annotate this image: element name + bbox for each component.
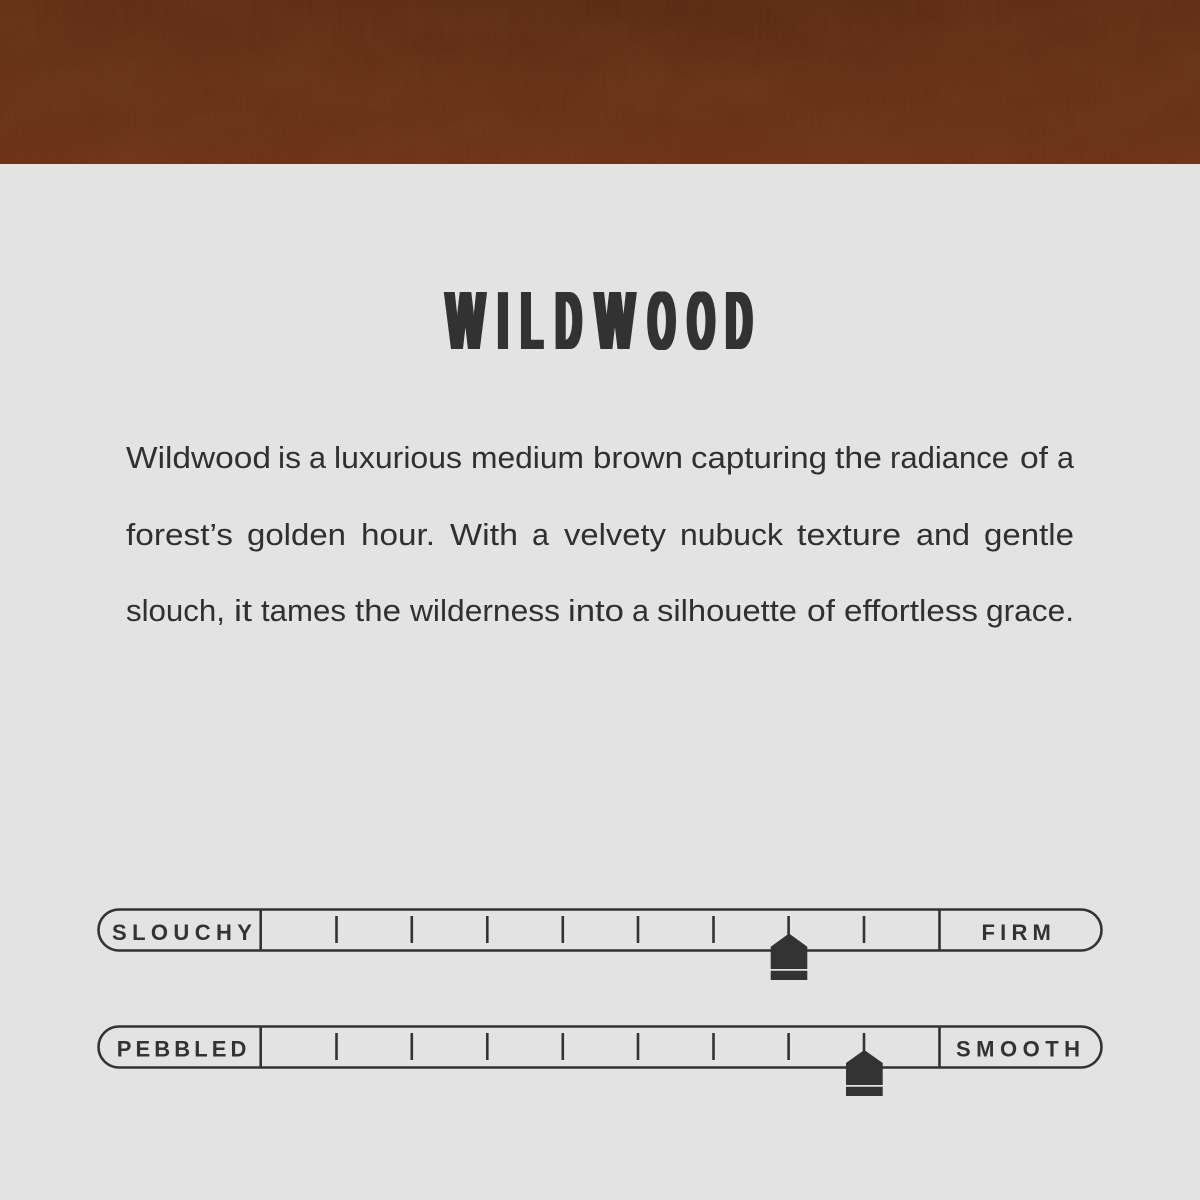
description text: capturing: [691, 440, 827, 475]
description text: tames: [261, 593, 346, 628]
description text: velvety: [564, 517, 667, 552]
label: smooth: SMOOTH: [956, 1036, 1086, 1062]
description text: nubuck: [680, 517, 784, 552]
description text: a: [309, 440, 327, 475]
scale: pebbled to smooth: [97, 1025, 1103, 1096]
label: pebbled: PEBBLED: [117, 1036, 251, 1062]
description text: hour.: [361, 517, 435, 552]
marker: [846, 1050, 883, 1096]
description text: and: [916, 517, 970, 552]
description text: slouch,: [126, 593, 225, 628]
description text: effortless: [844, 593, 978, 628]
description text: texture: [797, 517, 901, 552]
description text: brown: [593, 440, 683, 475]
description text: radiance: [890, 440, 1009, 475]
description text: grace.: [986, 593, 1074, 628]
description text: a: [1057, 440, 1075, 475]
description text: the: [355, 593, 401, 628]
marker: [771, 934, 807, 980]
description text: luxurious: [334, 440, 462, 475]
scale: slouchy to firm: [97, 908, 1103, 980]
description text: of: [807, 593, 835, 628]
description text: wilderness: [409, 593, 560, 628]
description text: it: [234, 593, 252, 628]
description text: into: [568, 593, 624, 628]
description text: gentle: [984, 517, 1074, 552]
label: slouchy: SLOUCHY: [112, 920, 257, 945]
description text: golden: [247, 517, 346, 552]
description text: the: [835, 440, 882, 475]
leather texture banner: [0, 0, 1200, 164]
description text: Wildwood: [126, 440, 271, 475]
description text: of: [1020, 440, 1048, 475]
description text: is: [278, 440, 301, 475]
description text: silhouette: [657, 593, 797, 628]
description text: [126, 440, 1075, 628]
description text: With: [450, 517, 518, 552]
title: [444, 280, 753, 360]
description text: a: [632, 593, 650, 628]
description text: forest’s: [126, 517, 233, 552]
label: firm: FIRM: [982, 920, 1056, 945]
description text: medium: [471, 440, 584, 475]
description text: a: [532, 517, 550, 552]
